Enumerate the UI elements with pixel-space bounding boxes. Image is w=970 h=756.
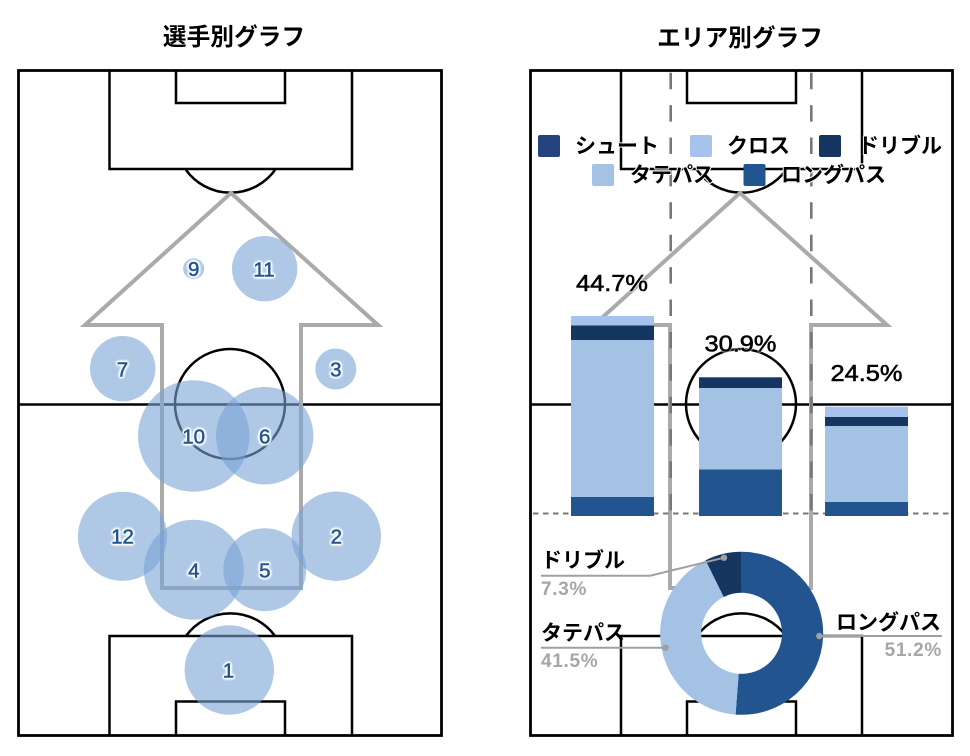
arrow outline right (594, 193, 887, 588)
legend: シュート (575, 135, 659, 158)
player circles (78, 236, 381, 715)
bar: left zone (571, 316, 654, 516)
legend: ロングパス (781, 163, 886, 187)
donut callout: long pass (816, 610, 942, 661)
donut callout: dribble: ドリブル (541, 548, 625, 572)
donut callout: dribble: 7.3% (541, 579, 587, 600)
panel: area graph pitch (530, 70, 952, 736)
panel: player graph pitch (18, 70, 442, 736)
legend: クロス (727, 135, 790, 158)
bar value: left: 44.7% (576, 270, 648, 296)
player numbers: 7 (117, 358, 128, 382)
bar: centre zone (699, 377, 782, 516)
player numbers: 3 (330, 358, 342, 382)
donut callout: through pass: 41.5% (541, 651, 598, 672)
player numbers: 10 (182, 426, 205, 448)
donut chart (660, 552, 823, 715)
title: player graph: 選手別グラフ (163, 23, 305, 51)
player numbers (111, 258, 342, 682)
donut callout: through pass (541, 622, 669, 672)
legend: ドリブル (858, 134, 942, 158)
legend (538, 134, 942, 187)
pitch markings right (530, 70, 952, 736)
bar value: right: 24.5% (830, 360, 902, 386)
pitch markings left (18, 70, 442, 736)
bar: right zone (825, 407, 908, 516)
arrow outline left (85, 193, 378, 588)
legend: タテパス (630, 164, 714, 187)
bar value: centre: 30.9% (704, 330, 776, 356)
player numbers: 9 (188, 258, 199, 281)
player numbers: 6 (259, 426, 270, 448)
player numbers: 4 (188, 560, 200, 582)
donut callout: long pass: ロングパス (836, 610, 941, 634)
donut callout: through pass: タテパス (541, 622, 625, 645)
player numbers: 5 (259, 560, 271, 582)
donut callout: dribble (541, 548, 727, 600)
player numbers: 1 (223, 660, 234, 682)
donut callout: long pass: 51.2% (885, 640, 942, 661)
player numbers: 12 (111, 526, 134, 548)
area divider lines (533, 73, 952, 515)
player numbers: 11 (253, 258, 275, 282)
player numbers: 2 (331, 526, 342, 548)
title: area graph: エリア別グラフ (657, 24, 823, 52)
